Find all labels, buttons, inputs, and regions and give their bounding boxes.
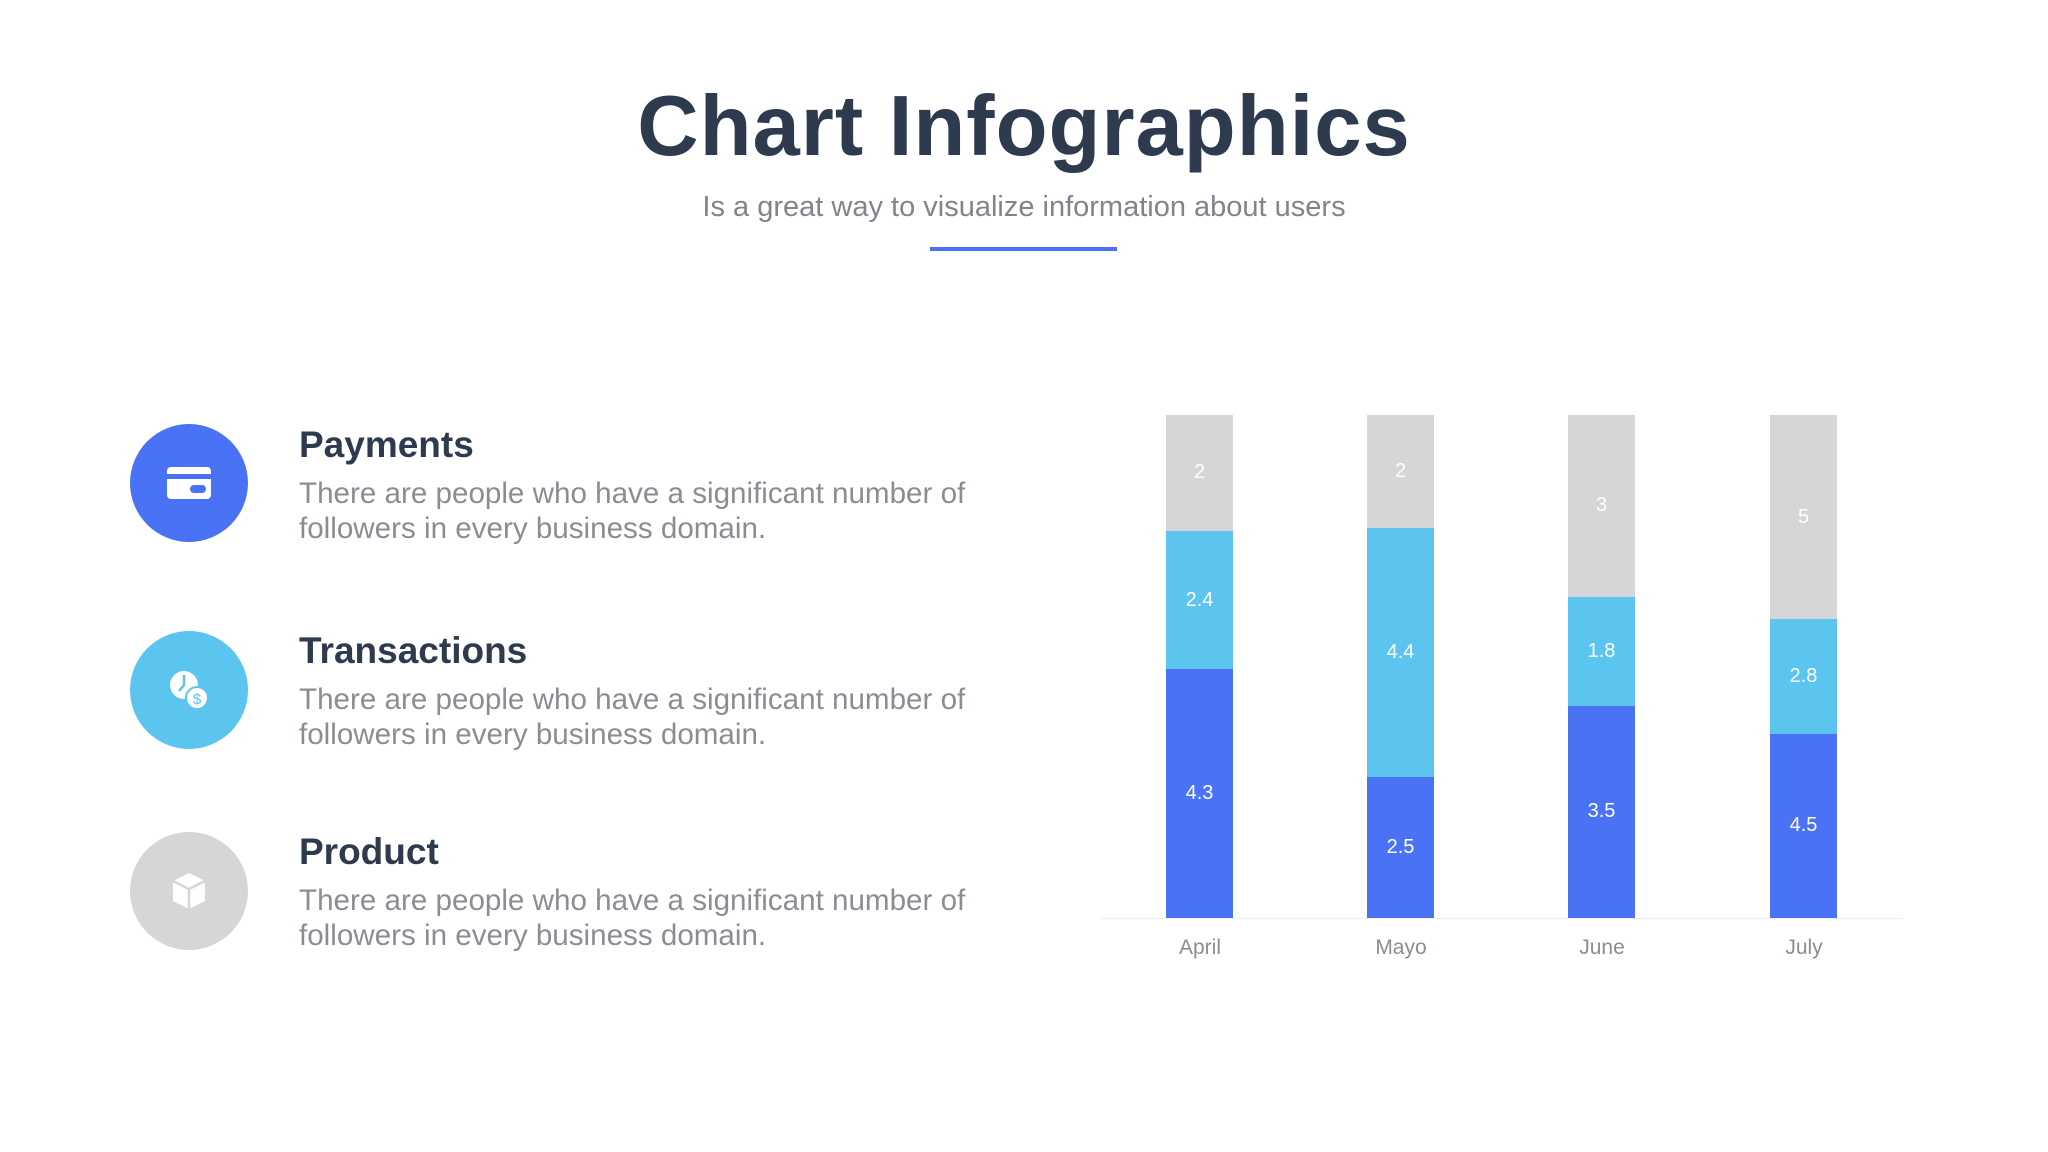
text: transactions bbox=[299, 630, 966, 751]
bar: Mayo: 4.4 bbox=[1387, 641, 1414, 663]
bar: June: 3 bbox=[1596, 494, 1607, 516]
text: payments: Payments bbox=[299, 424, 474, 465]
axis labels: April bbox=[1179, 936, 1221, 959]
bar: July bbox=[1770, 415, 1837, 918]
text: payments: There are people who have a significant number of followers in every business domain. bbox=[299, 477, 965, 545]
baseline bbox=[1101, 918, 1903, 919]
bar: April bbox=[1166, 415, 1233, 918]
icon: product box bbox=[130, 832, 248, 950]
title: Chart Infographics bbox=[637, 79, 1411, 174]
axis labels bbox=[1179, 936, 1823, 959]
text: product bbox=[299, 831, 966, 952]
bar: June: 1.8 bbox=[1588, 640, 1615, 662]
text: transactions: There are people who have a significant number of followers in every business domain. bbox=[299, 683, 965, 751]
bar: Mayo: 2.5 bbox=[1387, 836, 1414, 858]
bar: July: 2.8 bbox=[1790, 665, 1817, 687]
bar: June bbox=[1568, 415, 1635, 918]
subtitle: Is a great way to visualize information about users bbox=[702, 191, 1346, 223]
bar: June: 3.5 bbox=[1588, 800, 1615, 822]
bar: April: 2 bbox=[1194, 461, 1205, 483]
icon: payments card bbox=[130, 424, 248, 542]
bar: April: 2.4 bbox=[1186, 588, 1213, 610]
title underline bbox=[930, 247, 1117, 251]
bar: April: 4.3 bbox=[1186, 782, 1213, 804]
icon: transactions: $ bbox=[193, 691, 202, 708]
bar: Mayo: 2 bbox=[1395, 460, 1406, 482]
bar: July: 4.5 bbox=[1790, 814, 1817, 836]
axis labels: Mayo bbox=[1375, 936, 1427, 959]
text: payments bbox=[299, 424, 966, 545]
text: product: There are people who have a significant number of followers in every business domain. bbox=[299, 884, 965, 952]
icon: transactions bbox=[130, 631, 248, 749]
axis labels: June bbox=[1579, 936, 1625, 959]
text: product: Product bbox=[299, 831, 439, 872]
bar: Mayo bbox=[1367, 415, 1434, 918]
axis labels: July bbox=[1785, 936, 1823, 959]
text: transactions: Transactions bbox=[299, 630, 527, 671]
bar: July: 5 bbox=[1798, 506, 1809, 528]
